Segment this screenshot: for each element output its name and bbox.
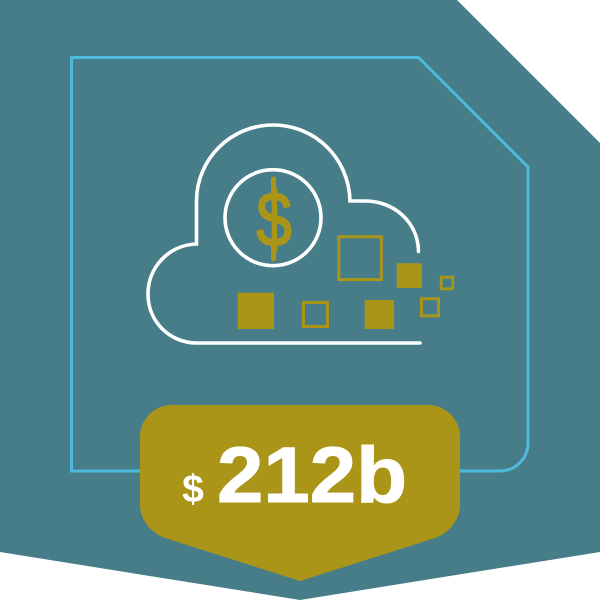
value badge	[140, 405, 460, 581]
inner outline frame	[72, 58, 528, 471]
dollar sign	[256, 176, 292, 262]
outlined square tiny	[441, 277, 453, 289]
filled square left	[238, 293, 274, 329]
badge shape	[140, 405, 460, 581]
outlined square medium	[304, 302, 328, 326]
icon: cloud with dollar and data squares	[148, 125, 453, 343]
dollar glyph: $	[256, 176, 292, 262]
outlined square small	[422, 299, 438, 316]
filled square right	[397, 263, 422, 288]
filled square centre	[365, 300, 394, 329]
dollar bar bottom	[271, 246, 276, 259]
dollar prefix: $	[182, 468, 204, 511]
value: 212b	[217, 430, 407, 519]
dollar bar top	[271, 179, 276, 192]
coin circle	[225, 170, 321, 266]
outlined square large	[339, 237, 381, 280]
cloud outline	[148, 125, 420, 343]
